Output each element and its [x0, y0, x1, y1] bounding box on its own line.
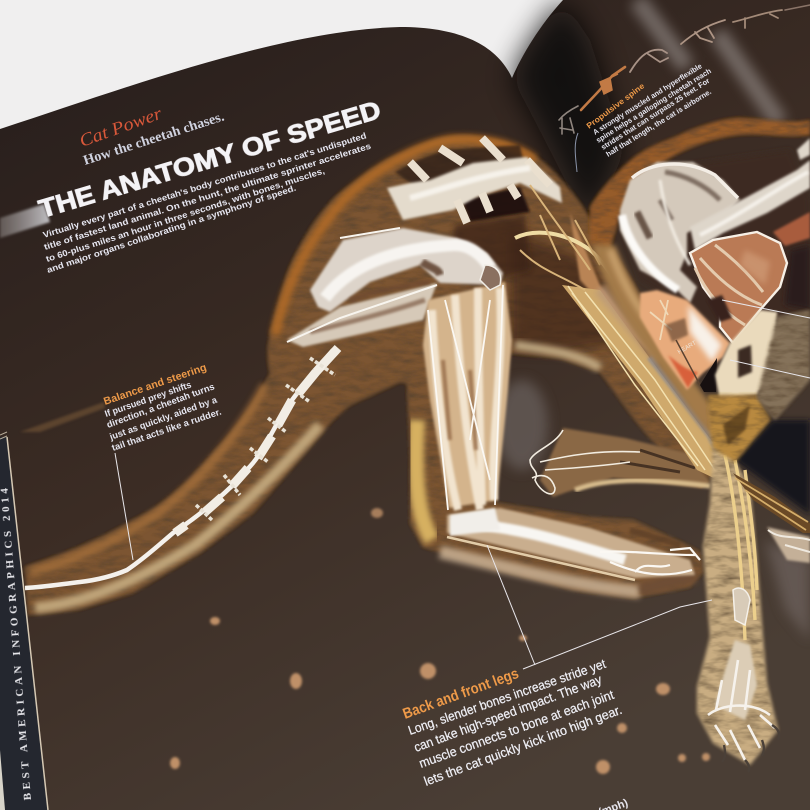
gutter page fold	[515, 185, 730, 480]
bokeh spots	[170, 508, 710, 774]
book spine strip	[0, 432, 48, 810]
hind leg bones and muscle	[423, 265, 512, 510]
heart label: HEART	[677, 340, 698, 356]
callout: balance and steering: If pursued prey shifts	[103, 380, 193, 419]
cheetah running sequence icons	[559, 5, 810, 134]
callout: balance and steering: just as quickly, aided by a	[107, 394, 219, 442]
callout: back and front legs: can take high-speed impact. The way	[412, 672, 604, 755]
callout: propulsive spine: strides that can surpass 25 feet. For	[599, 76, 711, 152]
callout: propulsive spine: Propulsive spine	[585, 81, 647, 131]
intro paragraph: title of fastest land animal. On the hunt, the ultimate sprinter accelerates	[43, 141, 372, 252]
forelimb on left page	[530, 428, 710, 497]
callout motion smear	[20, 402, 105, 432]
callout: propulsive spine: A strongly muscled and hyperflexible	[591, 61, 704, 137]
leg tone: yellow outer fur	[416, 420, 432, 540]
callout: back and front legs: Back and front legs	[401, 665, 521, 723]
section label: Cat Power: Cat Power	[77, 103, 165, 151]
callout: propulsive spine: spine helps a galloping cheetah reach	[594, 66, 713, 145]
callout: balance and steering: tail that acts like a rudder.	[110, 407, 223, 453]
callout: balance and steering: direction, a cheetah turns	[105, 381, 216, 430]
cheetah fur silhouette: tail, body, hind leg	[25, 136, 727, 615]
callout: balance and steering	[102, 362, 223, 453]
dark windows behind vertebrae	[395, 145, 525, 190]
tail tone: orange upper fur	[30, 385, 265, 572]
subtitle: How the cheetah chases.	[82, 110, 226, 169]
leader lines	[115, 133, 810, 669]
callout: back and front legs: muscle connects to bone at each joint	[417, 687, 616, 771]
tail tone: pale underside	[35, 425, 320, 608]
callout: back and front legs	[401, 656, 624, 789]
claws	[722, 725, 779, 772]
callout: back and front legs: Long, slender bones increase stride yet	[406, 656, 608, 738]
lower chest muscles	[708, 310, 810, 462]
callout: back and front legs: lets the cat quickly kick into high gear.	[422, 702, 624, 789]
body tone: orange edge glow	[275, 140, 535, 335]
callout: propulsive spine: half that length, the cat is airborne.	[604, 87, 713, 159]
spine section, chest	[690, 138, 810, 310]
foot tone: pale underside fur	[440, 552, 640, 592]
lungs	[690, 232, 787, 343]
heart and organs	[640, 290, 730, 392]
ribcage	[620, 162, 740, 303]
tail vertebrae	[25, 348, 338, 588]
front leg and paw	[697, 450, 779, 772]
callout: balance and steering: Balance and steering	[102, 362, 208, 408]
hind foot	[447, 508, 700, 580]
intro paragraph: Virtually every part of a cheetah's body contributes to the cat's undisputed	[42, 130, 367, 240]
fur arc, chest section	[590, 118, 810, 440]
hip-to-shoulder band and far paw	[733, 473, 810, 563]
body tone: hip shade	[510, 230, 640, 352]
pelvis and femur	[287, 228, 503, 347]
black wedge	[700, 358, 717, 392]
title motion smear	[0, 204, 50, 238]
intro paragraph	[42, 130, 372, 275]
intro paragraph: and major organs collaborating in a symphony of speed.	[45, 183, 297, 275]
title: THE ANATOMY OF SPEED	[36, 96, 384, 224]
intro paragraph: to 60-plus miles an hour in three seconds, with bones, muscles,	[45, 166, 326, 264]
speckled light in gap between legs	[496, 380, 548, 470]
spine vertebrae	[387, 138, 562, 285]
paw bones	[708, 660, 775, 760]
body tone: pale belly edge	[515, 345, 600, 368]
